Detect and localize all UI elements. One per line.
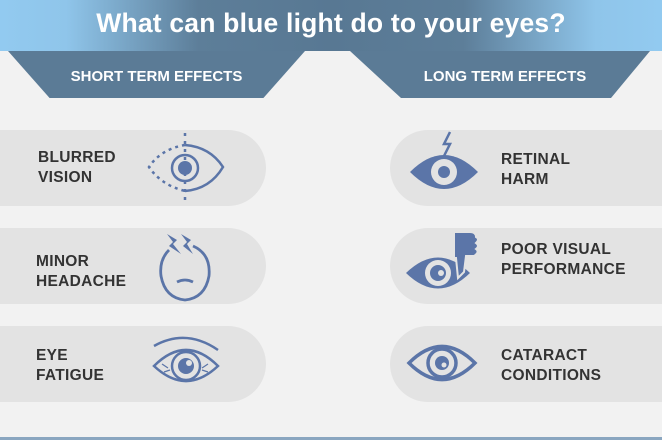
icon: blurred eye: [148, 133, 224, 200]
label: EYE: [36, 347, 68, 364]
label: CATARACT: [501, 347, 587, 364]
label: [501, 347, 601, 384]
icon: outlined eye: [406, 344, 478, 382]
tab: long term: LONG TERM EFFECTS: [424, 68, 586, 85]
icon: head: [159, 234, 211, 302]
label: [38, 149, 116, 186]
label: [36, 253, 126, 290]
label: BLURRED: [38, 149, 116, 166]
icon: eye with lightning: [410, 132, 478, 189]
panel: eye fatigue: [0, 326, 266, 402]
label: VISION: [38, 169, 92, 186]
panel: cataract: [390, 326, 662, 402]
panel: minor headache: [0, 228, 266, 304]
icon: tired eye: [152, 336, 220, 382]
label: FATIGUE: [36, 367, 104, 384]
panel: retinal harm: [390, 130, 662, 206]
label: MINOR: [36, 253, 89, 270]
label: CONDITIONS: [501, 367, 601, 384]
icon: eye with thumbs down: [406, 233, 477, 288]
label: [501, 241, 626, 278]
label: PERFORMANCE: [501, 261, 626, 278]
header band: [0, 0, 662, 51]
title: What can blue light do to your eyes?: [96, 8, 566, 38]
tab: long term: [350, 51, 650, 98]
label: HEADACHE: [36, 273, 126, 290]
label: HARM: [501, 171, 549, 188]
label: [501, 151, 570, 188]
label: POOR VISUAL: [501, 241, 611, 258]
tab: short term: [8, 51, 305, 98]
label: [36, 347, 104, 384]
tab: short term: SHORT TERM EFFECTS: [71, 68, 242, 85]
panel: poor visual performance: [390, 228, 662, 304]
label: RETINAL: [501, 151, 570, 168]
panel: blurred vision: [0, 130, 266, 206]
